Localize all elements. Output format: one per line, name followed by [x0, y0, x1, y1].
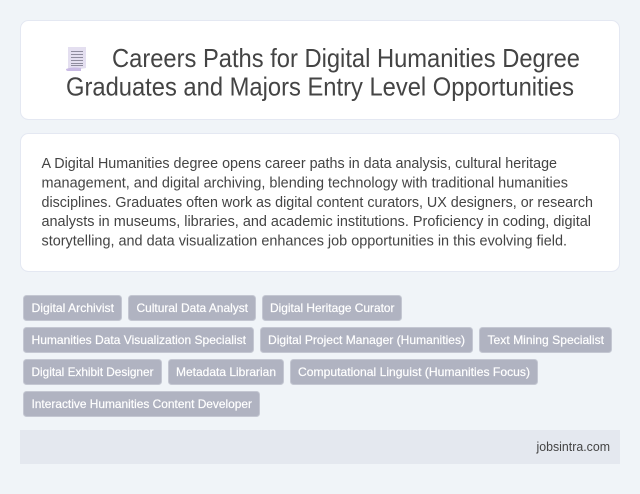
tag: Interactive Humanities Content Developer: Interactive Humanities Content Developer [32, 397, 252, 411]
tag: Digital Heritage Curator [262, 296, 402, 320]
description text: storytelling, and data visualization enhances job opportunities in this evolving field. [42, 234, 567, 250]
tag list [24, 296, 612, 416]
description text: analysts in museums, libraries, and academic institutions. Proficiency in coding, digital [42, 214, 591, 230]
tag: Metadata Librarian: Metadata Librarian [176, 365, 276, 379]
tag: Digital Project Manager (Humanities): Digital Project Manager (Humanities) [268, 333, 465, 347]
tag: Computational Linguist (Humanities Focus) [290, 360, 538, 384]
tag: Cultural Data Analyst: Cultural Data Analyst [136, 301, 249, 315]
tag: Digital Exhibit Designer: Digital Exhibit Designer [32, 365, 154, 379]
tag: Metadata Librarian [168, 360, 284, 384]
tag: Humanities Data Visualization Specialist: Humanities Data Visualization Specialist [32, 333, 247, 347]
description text: A Digital Humanities degree opens career paths in data analysis, cultural heritage [42, 156, 557, 172]
tag: Digital Archivist: Digital Archivist [32, 301, 115, 315]
heading: Careers Paths for Digital Humanities Degree [112, 45, 580, 73]
footer source: jobsintra.com [536, 439, 610, 454]
description text: management, and digital archiving, blending technology with traditional humanities [42, 176, 568, 192]
panel: title [20, 20, 620, 120]
tag: Computational Linguist (Humanities Focus): Computational Linguist (Humanities Focus) [298, 365, 530, 379]
tag: Digital Project Manager (Humanities) [260, 328, 472, 352]
footer [20, 430, 620, 464]
tag: Cultural Data Analyst [128, 296, 256, 320]
tag: Text Mining Specialist [480, 328, 612, 352]
tag: Text Mining Specialist: Text Mining Specialist [488, 333, 605, 347]
icon: scroll [66, 47, 86, 71]
tag: Humanities Data Visualization Specialist [24, 328, 254, 352]
heading [66, 45, 580, 102]
heading: Graduates and Majors Entry Level Opportunities [66, 74, 574, 102]
description text: disciplines. Graduates often work as digital content curators, UX designers, or research [42, 195, 593, 211]
panel: description [20, 134, 620, 272]
tag: Digital Exhibit Designer [24, 360, 162, 384]
tag: Digital Heritage Curator: Digital Heritage Curator [270, 301, 394, 315]
description text [42, 156, 593, 250]
tag: Interactive Humanities Content Developer [24, 392, 260, 416]
tag: Digital Archivist [24, 296, 122, 320]
